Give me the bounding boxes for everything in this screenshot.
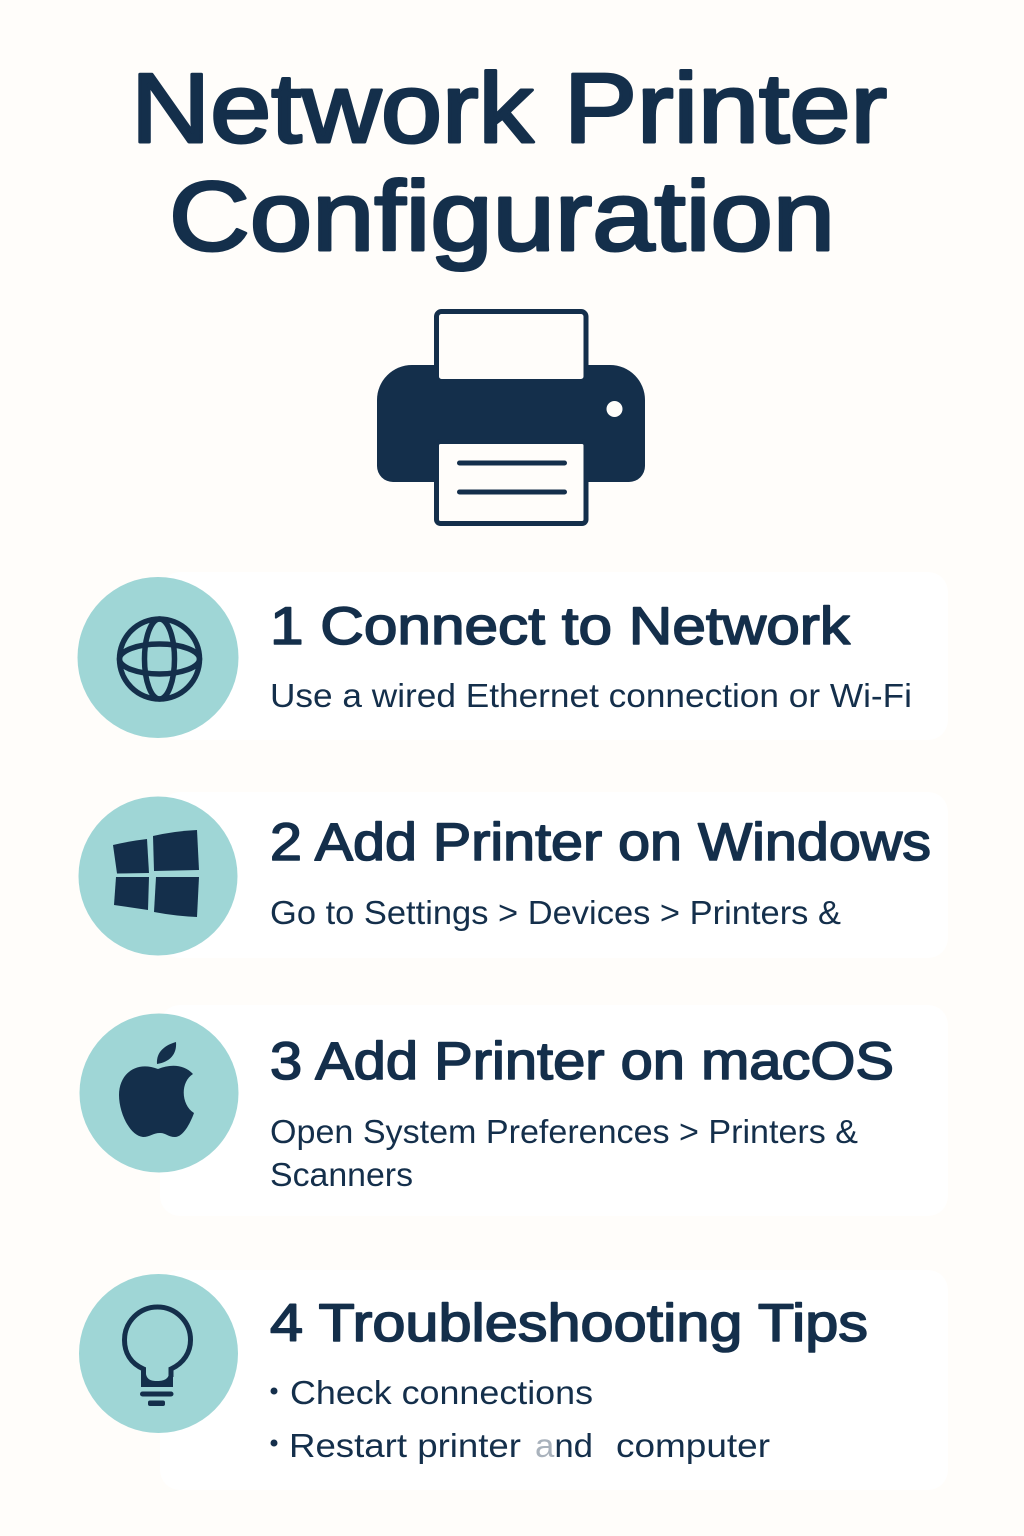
tip: restart printer and computer — [270, 1427, 770, 1464]
panel: step 2 add printer on windows — [78, 792, 948, 958]
title: Configuration — [169, 161, 835, 271]
step 4 card — [160, 1270, 948, 1490]
step 2 description: Go to Settings > Devices > Printers & — [270, 894, 841, 931]
step 3 description: Open System Preferences > Printers & — [270, 1113, 858, 1150]
icon: printer — [377, 312, 645, 524]
step 1 icon: globe — [78, 577, 238, 738]
step 1 heading: 1 Connect to Network — [270, 597, 851, 656]
panel: step 1 connect to network — [78, 572, 948, 740]
panel: step 3 add printer on macos — [80, 1005, 948, 1216]
title: Network Printer — [131, 53, 887, 163]
step 1 card — [160, 572, 948, 740]
step 3 description: Scanners — [270, 1156, 413, 1193]
step 2 icon: windows — [78, 796, 238, 956]
step 4 heading: 4 Troubleshooting Tips — [270, 1294, 868, 1353]
step 3 card — [160, 1005, 948, 1216]
step 1 description: Use a wired Ethernet connection or Wi-Fi — [270, 677, 912, 714]
step 4 icon: light bulb — [79, 1274, 238, 1433]
tip: check connections: Check connections — [290, 1374, 593, 1411]
title — [131, 53, 887, 271]
step 2 card — [160, 792, 948, 958]
step 3 description — [270, 1113, 858, 1193]
tip: restart printer and computer: Restart printer — [289, 1427, 521, 1464]
step 3 heading: 3 Add Printer on macOS — [270, 1032, 894, 1091]
tip: restart printer and computer: computer — [616, 1427, 770, 1464]
step 3 icon: apple — [80, 1014, 238, 1172]
step 2 heading: 2 Add Printer on Windows — [270, 813, 931, 872]
panel: step 4 troubleshooting tips — [79, 1270, 948, 1490]
tip: restart printer and computer: and — [535, 1427, 593, 1464]
